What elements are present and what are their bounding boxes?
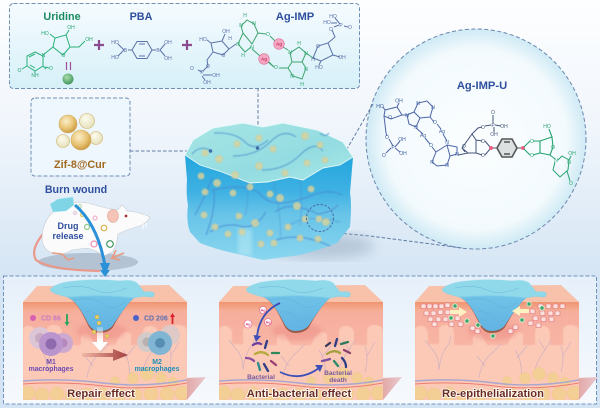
plus [182,40,192,50]
structure: Ag-IMP-U: P [491,123,495,129]
structure: Ag-IMP: P [339,23,343,29]
M1 macrophages [29,327,73,356]
label: Bacterial death: death [329,377,347,384]
structure: Ag-IMP [190,13,352,88]
structure: Ag-IMP: O [266,32,270,38]
structure: Ag-IMP-U: O [530,139,534,145]
structure: Ag-IMP-U: O [530,153,534,159]
structure: Ag-IMP-U: O [569,181,573,187]
structure: Ag-IMP-U: O [481,139,485,145]
icon: Zif-8 particles [56,114,102,150]
structure: Ag-IMP-U: O [385,135,389,141]
structure: Ag-IMP: H [297,41,301,47]
structure: Ag-IMP: OH [338,55,346,61]
rat ear [108,210,118,222]
structure: Ag-IMP-U: N [430,160,434,166]
label: Zif-8@Cur [54,159,107,171]
structure: Ag-IMP-U: HO [376,104,384,110]
rat body [42,202,150,256]
structure: Ag-IMP-U: N [431,105,435,111]
structure: Ag-IMP-U: O [481,125,485,131]
structure: Ag-IMP-U: N [445,140,449,146]
M1 label: M1 [46,359,56,366]
Ag badge lower: Ag [261,56,267,62]
structure: Ag-IMP-U: N [455,152,459,158]
CD 206 marker [133,313,175,324]
text: Drug release: Drug [58,221,78,231]
arrow: to death [280,365,323,376]
structure: Ag-IMP: H [311,57,315,63]
heading: Uridine: Uridine [43,11,81,23]
structure: PBA: B [124,48,128,54]
structure: Ag-IMP: O [348,25,352,31]
structure: Ag-IMP-U: OH [500,124,508,130]
structure: Ag-IMP-U: OH [399,151,407,157]
structure: Ag-IMP-U: O [433,120,437,126]
structure: uridine: O [18,68,22,74]
gel body [185,155,353,260]
structure: Ag-IMP: H [243,13,247,19]
gel plug [442,280,546,333]
structure: Ag-IMP-U: N [405,113,409,119]
gel shadow [270,233,374,259]
structure: Ag-IMP: HO [199,37,207,43]
skin block [21,285,206,403]
heading: Ag-IMP-U: Ag-IMP-U [457,80,507,92]
structure: uridine: OH [67,25,75,31]
structure: Ag-IMP: O [206,64,210,70]
gel fibers [195,150,342,246]
structure: Ag-IMP-U: O [551,145,555,151]
gel plug [50,280,154,333]
structure: uridine: N [42,53,46,59]
structure: Ag-IMP: H [228,36,232,42]
structure: Ag-IMP: O [190,66,194,72]
arrow: right migration [512,306,529,316]
CD 206 marker: CD 206 [144,316,168,322]
structure: Ag-IMP-U [376,98,576,187]
text: Drug release [52,221,84,241]
Ag ions: Ag [260,308,266,312]
arrow: drug release [75,205,110,276]
structure: Ag-IMP: N [239,23,243,29]
structure: Ag-IMP-U: N [414,125,418,131]
structure: Ag-IMP: N [288,50,292,56]
structure: uridine: O [49,66,53,72]
structure: Ag-IMP-U: OH [395,98,403,104]
rat shadow [38,253,138,271]
structure: Ag-IMP-U: O [462,144,466,150]
arrow: polarisation [82,349,128,361]
illustration: rat [34,197,150,276]
structure: Ag-IMP-U: OH [490,132,498,138]
structure: Ag-IMP: P [200,70,204,76]
Ag badge upper [274,39,284,49]
structure: uridine: OH [85,37,93,43]
structure: Ag-IMP-U: O [388,115,392,121]
Ag badge upper: Ag [276,42,282,46]
structure: Ag-IMP-U: N [554,158,558,164]
structure: Ag-IMP: N [290,74,294,80]
panel: Ag-IMP-U circle [366,29,586,249]
connector: Zif-8 to hydrogel [130,150,211,152]
structure: uridine [18,25,93,79]
label: Re-epithelialization: Re-epithelialization [442,388,544,400]
Ag ions [244,306,272,328]
structure: Ag-IMP: OH [212,73,220,79]
structure: Ag-IMP: H [300,82,304,88]
heading: Ag-IMP: Ag-IMP [276,11,315,23]
structure: Ag-IMP-U: Ag [439,129,445,135]
structure: Ag-IMP-U: HO [543,124,551,130]
heading: PBA: PBA [130,11,153,23]
skin block [413,285,598,403]
bacteria cluster [246,341,279,371]
icon: uridine ball [62,74,74,84]
green stem particles [449,302,544,338]
zoom circle [306,204,334,232]
equals sign [66,62,70,70]
structure: Ag-IMP: N [304,51,308,57]
structure: Ag-IMP-U: Ag [420,133,426,139]
panel: anti-bacterial effect [217,280,402,403]
structure: Ag-IMP-U: O [429,143,433,149]
structure: Ag-IMP: N [304,67,308,73]
label: Bacterial: Bacterial [247,374,275,381]
label: Anti-bacterial effect: Anti-bacterial effect [247,388,351,400]
structure: Ag-IMP: O [329,27,333,33]
M2 label: M2 [152,359,162,366]
structure: Ag-IMP: HO [323,20,331,26]
CD 86 marker [30,314,70,326]
structure: Ag-IMP: OH [222,29,230,35]
structure: Ag-IMP-U: O [481,153,485,159]
structure: Ag-IMP-U: OH [568,151,576,157]
gel top surface [185,123,353,183]
structure: Ag-IMP: OH [203,80,211,86]
structure: uridine: O [62,53,66,59]
arrow: release [92,327,108,351]
rat eye [125,215,127,217]
released particles [92,315,109,338]
rat tail [34,234,100,271]
structure: Ag-IMP-U: P [391,145,395,151]
structure: Ag-IMP-U: N [416,101,420,107]
arrow: left migration [450,307,467,317]
arrow: Ag release [254,303,280,342]
nanoparticles [198,132,330,247]
hydrogel [185,123,374,260]
CD 86 marker: CD 86 [41,316,61,322]
structure: Ag-IMP: O [316,44,320,50]
Ag ions: Ag [245,322,251,326]
drug particles [74,204,113,247]
skin block [217,285,402,403]
panel: Zif-8@Cur [31,98,130,176]
structure: PBA: OH [164,40,172,46]
label: Repair effect: Repair effect [67,388,135,400]
plus [94,40,104,50]
structure: Ag-IMP-U: OH [398,137,406,143]
structure: Ag-IMP: N [252,21,256,27]
structure: PBA: HO [111,40,119,46]
panel: components [10,4,360,88]
structure: Ag-IMP: O [222,53,226,59]
structure: Ag-IMP-U: N [567,160,571,166]
text: Drug release: release [52,231,84,241]
structure: PBA: B [156,48,160,54]
structure: Ag-IMP: N [236,42,240,48]
heading: Burn wound: Burn wound [45,184,107,196]
keratinocyte cells [421,303,565,334]
dead bacteria [322,339,350,367]
structure: Ag-IMP: HO [329,14,337,20]
structure: PBA [111,40,172,62]
connector lines: hydrogel to circle [315,104,462,248]
panel: repair effect [21,280,206,403]
rat teeth [143,223,146,229]
Ag ions: Ag [265,320,271,324]
structure: Ag-IMP-U: O [382,153,386,159]
panel: effects [4,276,598,404]
M2 label: macrophages [135,366,180,373]
structure: Ag-IMP: HO [315,65,323,71]
structure: Ag-IMP-U: O [491,110,495,116]
structure: uridine: NH [31,73,39,79]
gel patch [50,197,74,212]
panel: re-epithelialization [413,280,598,403]
connector dots [209,146,259,153]
label: Bacterial death: Bacterial [324,370,352,377]
gel plug [246,280,350,333]
gel highlight [238,228,252,256]
structure: Ag-IMP-U: N [445,163,449,169]
structure: PBA: OH [164,56,172,62]
release arrow tip over panel [100,270,110,277]
structure: Ag-IMP: H [241,53,245,59]
M1 label: macrophages [29,366,74,373]
connector: top box to hydrogel [257,88,259,148]
structure: Ag-IMP: O [274,65,278,71]
surface fibers [192,133,329,170]
structure: PBA: HO [111,55,119,61]
rat feet [52,250,124,260]
M2 macrophages [137,325,180,355]
structure: uridine: HO [41,31,49,37]
structure: Ag-IMP: N [250,45,254,51]
Ag badge lower [259,54,269,64]
